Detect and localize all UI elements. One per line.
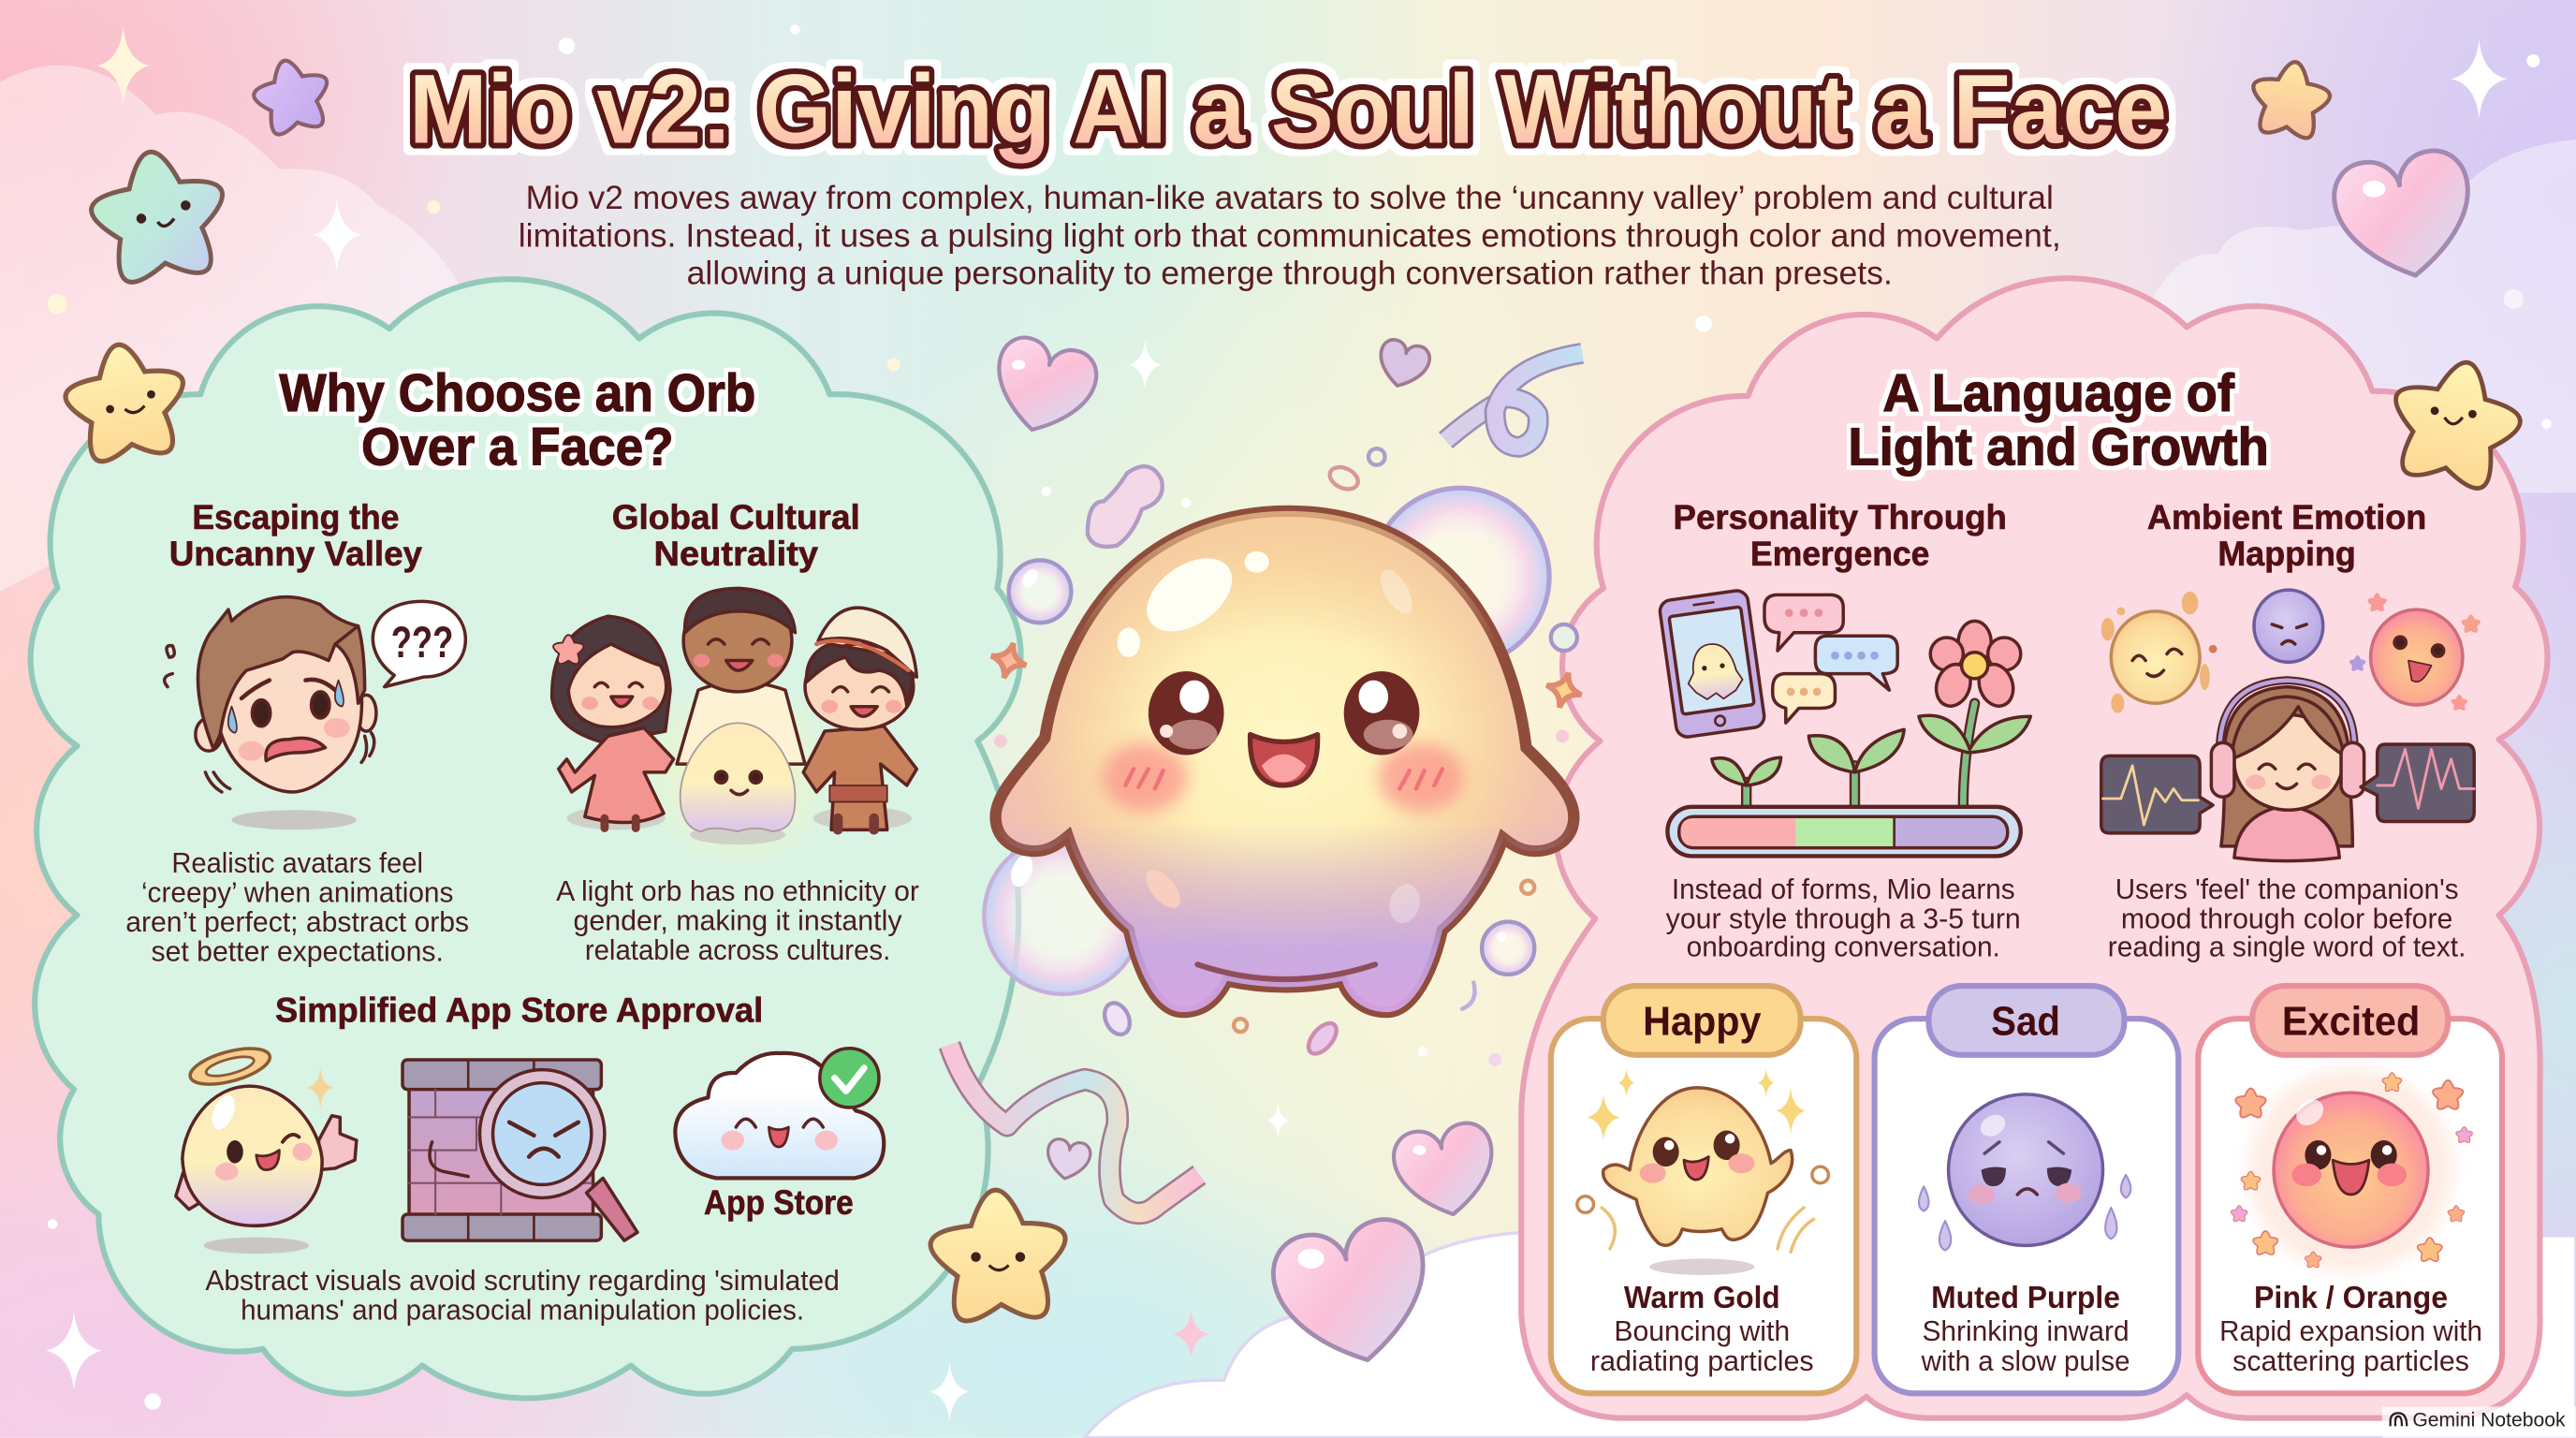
orb belly line bbox=[1197, 964, 1375, 979]
orb highlights bbox=[1117, 543, 1424, 927]
heading: a language of light and growth: Light and Growth bbox=[1848, 418, 2269, 477]
decorative bubbles bbox=[984, 448, 1587, 1059]
text: pink orange: Pink / Orange bbox=[2254, 1281, 2448, 1315]
icon: large heart bottom bbox=[1266, 1212, 1442, 1375]
subheading: global cultural neutrality: Neutrality bbox=[654, 535, 819, 573]
text: cultural neutrality description: relatable across cultures. bbox=[585, 933, 890, 966]
subheading: simplified app store approval: Simplified App Store Approval bbox=[275, 991, 763, 1030]
subtitle bbox=[519, 180, 2061, 292]
text: pink orange bbox=[2219, 1281, 2482, 1377]
text: app store description bbox=[205, 1264, 840, 1326]
text: uncanny valley description: set better expectations. bbox=[151, 935, 444, 968]
pill: happy bbox=[1603, 986, 1801, 1055]
heading: why choose an orb: Why Choose an Orb bbox=[279, 363, 755, 422]
icon: three children around a glowing orb bbox=[552, 588, 916, 874]
orb eyes bbox=[1149, 671, 1419, 755]
subheading: personality through emergence bbox=[1674, 498, 2007, 573]
decorative hearts bbox=[985, 145, 2481, 1375]
card: excited bbox=[2198, 986, 2502, 1393]
pill: sad: Sad bbox=[1991, 999, 2060, 1045]
subheading: ambient emotion mapping: Ambient Emotion bbox=[2147, 498, 2426, 536]
pill: sad bbox=[1928, 986, 2124, 1055]
heading: why choose an orb: Over a Face? bbox=[361, 418, 674, 477]
text: ambient emotion description bbox=[2108, 873, 2466, 962]
text: warm gold: radiating particles bbox=[1590, 1344, 1814, 1377]
icon: small bubble bbox=[1009, 560, 1071, 623]
icon: pink orange excited orb bbox=[2231, 1068, 2472, 1271]
icon: small bubble right bbox=[1482, 922, 1534, 975]
text: uncanny valley description: aren’t perfect; abstract orbs bbox=[125, 905, 469, 938]
central orb mascot bbox=[996, 511, 1573, 1012]
icon: peanut bubble bbox=[1088, 466, 1163, 547]
text: muted purple bbox=[1921, 1281, 2130, 1377]
icon: yellow smiling star bottom bbox=[928, 1186, 1069, 1323]
decorative ribbons bbox=[949, 353, 1582, 1213]
panel: why choose an orb (mint cloud) bbox=[31, 279, 1021, 1399]
text: uncanny valley description: ‘creepy’ when animations bbox=[141, 876, 453, 909]
text: cultural neutrality description: gender, making it instantly bbox=[574, 903, 902, 936]
text: pink orange: Rapid expansion with bbox=[2219, 1314, 2482, 1347]
icon: yellow smiling star right bbox=[2381, 349, 2530, 494]
text: muted purple: Muted Purple bbox=[1931, 1281, 2120, 1315]
text: cultural neutrality description bbox=[556, 874, 919, 966]
text: cultural neutrality description: A light orb has no ethnicity or bbox=[556, 874, 919, 907]
icon: yellow smiling star left bbox=[59, 337, 192, 465]
icon: lavender star bbox=[248, 53, 335, 138]
text: emergence description bbox=[1666, 873, 2021, 962]
icon: iridescent smiling star bbox=[84, 143, 233, 286]
icon: three mood orbs bbox=[2101, 590, 2481, 713]
small ring and confetti bits bbox=[1100, 448, 1534, 1059]
text: ambient emotion description: reading a single word of text. bbox=[2108, 930, 2466, 962]
subheading: ambient emotion mapping: Mapping bbox=[2217, 535, 2356, 573]
text: uncanny valley description bbox=[125, 846, 469, 968]
icon: orange star top right bbox=[2247, 57, 2334, 140]
icon: diamond sparkle left bbox=[987, 638, 1031, 682]
subheading: personality through emergence: Emergence bbox=[1750, 535, 1929, 573]
heading: a language of light and growth: A Language of bbox=[1882, 363, 2234, 422]
icon: brick wall and magnifying glass bbox=[402, 1060, 637, 1240]
text: app store description: Abstract visuals avoid scrutiny regarding 'simulated bbox=[205, 1264, 840, 1297]
icon: winking orb with halo bbox=[176, 1041, 357, 1254]
icon: warm gold bouncing orb bbox=[1577, 1068, 1828, 1275]
icon: tiny bubble bbox=[1551, 624, 1577, 651]
subtitle: allowing a unique personality to emerge through conversation rather than presets. bbox=[687, 256, 1893, 292]
icon: heart upper centre bbox=[985, 332, 1102, 443]
text: warm gold: Warm Gold bbox=[1624, 1281, 1780, 1315]
text: ambient emotion description: Users 'feel' the companion's bbox=[2115, 873, 2459, 905]
icon: small lilac heart bbox=[1044, 1137, 1092, 1182]
card: happy bbox=[1551, 986, 1856, 1393]
card: sad bbox=[1875, 986, 2178, 1393]
icon: large bubble right bbox=[1372, 488, 1549, 666]
icon: small heart bbox=[1374, 337, 1432, 392]
icon: large bubble left bbox=[984, 836, 1142, 994]
icon: ribbon bottom bbox=[949, 1045, 1199, 1213]
subheading: escaping the uncanny valley bbox=[169, 498, 423, 573]
icon: diamond sparkle right bbox=[1542, 668, 1587, 712]
icon: heart top right bbox=[2329, 145, 2481, 286]
pill: happy: Happy bbox=[1643, 999, 1762, 1045]
text: ambient emotion description: mood through color before bbox=[2121, 902, 2452, 935]
icon: phone with chat bubbles bbox=[1659, 589, 1897, 739]
icon: heart lower right bbox=[1390, 1120, 1501, 1223]
text: muted purple: with a slow pulse bbox=[1921, 1344, 2130, 1377]
icon: girl with headphones and waveform bubbles bbox=[2101, 681, 2474, 861]
text: uncanny valley description: Realistic avatars feel bbox=[171, 846, 423, 879]
subtitle: Mio v2 moves away from complex, human-like avatars to solve the ‘uncanny valley’ problem and cultural bbox=[526, 180, 2054, 216]
panel: a language of light and growth (pink cloud) bbox=[1521, 278, 2547, 1418]
pill: excited bbox=[2252, 986, 2448, 1055]
icon: muted purple sad orb bbox=[1919, 1094, 2130, 1251]
text: app store description: humans' and parasocial manipulation policies. bbox=[241, 1293, 804, 1326]
text: pink orange: scattering particles bbox=[2232, 1344, 2469, 1377]
subheading: ambient emotion mapping bbox=[2147, 498, 2426, 573]
orb cheeks bbox=[1103, 742, 1464, 812]
label: app store: App Store bbox=[704, 1183, 854, 1222]
icon: ribbon top bbox=[1445, 353, 1582, 447]
watermark: gemini notebook: Gemini Notebook bbox=[2412, 1409, 2566, 1431]
subheading: global cultural neutrality bbox=[612, 498, 860, 573]
heading: why choose an orb bbox=[279, 363, 755, 477]
pill: excited: Excited bbox=[2282, 999, 2420, 1045]
heading: a language of light and growth bbox=[1848, 363, 2269, 477]
icon: worried face with question bubble bbox=[165, 597, 465, 829]
subheading: escaping the uncanny valley: Escaping the bbox=[192, 498, 399, 536]
icon: smiling cloud with green check bbox=[675, 1049, 884, 1178]
icon: progress bar bbox=[1667, 807, 2021, 856]
watermark: gemini notebook bbox=[2382, 1406, 2576, 1438]
text: warm gold bbox=[1590, 1281, 1814, 1377]
text: emergence description: Instead of forms, Mio learns bbox=[1672, 873, 2015, 905]
text: muted purple: Shrinking inward bbox=[1922, 1314, 2130, 1347]
title: Mio v2: Giving AI a Soul Without a Face bbox=[409, 55, 2167, 165]
orb mouth bbox=[1251, 735, 1318, 785]
subheading: personality through emergence: Personality Through bbox=[1674, 498, 2007, 536]
text: emergence description: your style through a 3-5 turn bbox=[1666, 902, 2021, 935]
subheading: global cultural neutrality: Global Cultural bbox=[612, 498, 860, 536]
icon: sprouts growing into a flower bbox=[1712, 621, 2030, 805]
subheading: escaping the uncanny valley: Uncanny Valley bbox=[169, 535, 423, 573]
subtitle: limitations. Instead, it uses a pulsing light orb that communicates emotions through color and movement, bbox=[519, 217, 2061, 254]
icon: worried face with question bubble: ??? bbox=[391, 618, 453, 668]
text: emergence description: onboarding conversation. bbox=[1687, 930, 2000, 962]
text: warm gold: Bouncing with bbox=[1614, 1314, 1790, 1347]
